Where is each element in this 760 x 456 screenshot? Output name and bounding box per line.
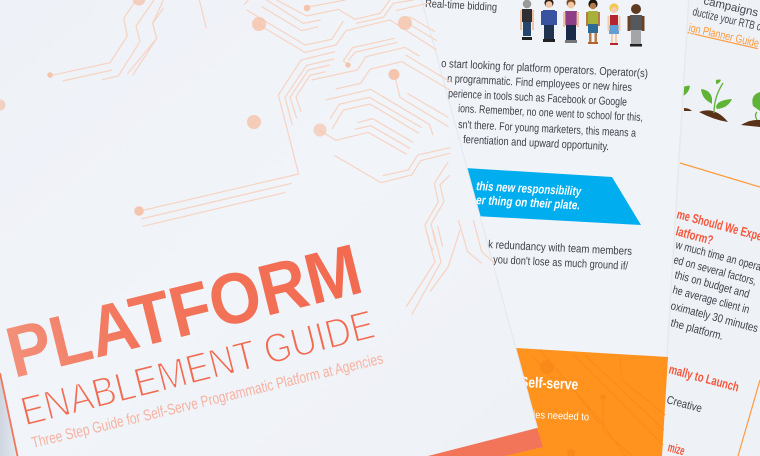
icon: seedlings: [683, 80, 760, 127]
paragraph: redundancy: [488, 239, 633, 273]
callout banner: this new responsibility: [476, 179, 582, 199]
orange self-serve panel: ies needed to: [533, 409, 589, 423]
orange self-serve panel: Self-serve: [520, 374, 579, 394]
sheet body text: the platform.: [669, 317, 724, 343]
subtitle: ENABLEMENT GUIDE: ENABLEMENT GUIDE: [16, 301, 379, 435]
callout banner: er thing on their plate.: [476, 193, 580, 212]
icon: six people: [520, 0, 644, 46]
sheet body text: Creative: [665, 394, 703, 415]
page: middle sheet with operators text: [400, 0, 690, 456]
paragraph: redundancy: you don't lose as much ground if/: [493, 254, 629, 273]
paragraph: platform operators: perience in tools such as Facebook or Google: [448, 88, 627, 109]
paragraph: platform operators: sn't there. For young marketers, this means a: [458, 119, 637, 140]
circuit pattern: [52, 0, 495, 315]
paragraph: platform operators: ions. Remember, no one went to school for this,: [458, 103, 643, 124]
red footer strip: [428, 428, 543, 456]
sheet body text: [665, 239, 760, 415]
title: PLATFORM: PLATFORM: [0, 229, 369, 394]
orange border line: [738, 380, 760, 456]
page: cover: [0, 0, 543, 456]
callout banner: [465, 168, 641, 225]
left page edge: [0, 373, 18, 456]
paragraph: platform operators: n programmatic. Find employees or new hires: [447, 73, 633, 94]
paragraph: redundancy: k redundancy with team members: [488, 239, 633, 258]
paragraph: platform operators: o start looking for platform operators. Operator(s): [441, 58, 648, 80]
tagline: Three Step Guide for Self-Serve Programmatic Platform at Agencies: [30, 350, 385, 452]
divider line: [680, 163, 760, 187]
sheet top text: [691, 0, 760, 34]
paragraph: platform operators: ferentiation and upward opportunity.: [463, 134, 609, 153]
sheet heading: how much time: latform?: [674, 223, 715, 248]
circuit nodes: [0, 0, 412, 216]
paragraph: platform operators: [441, 58, 648, 153]
orange self-serve panel: [500, 347, 668, 456]
